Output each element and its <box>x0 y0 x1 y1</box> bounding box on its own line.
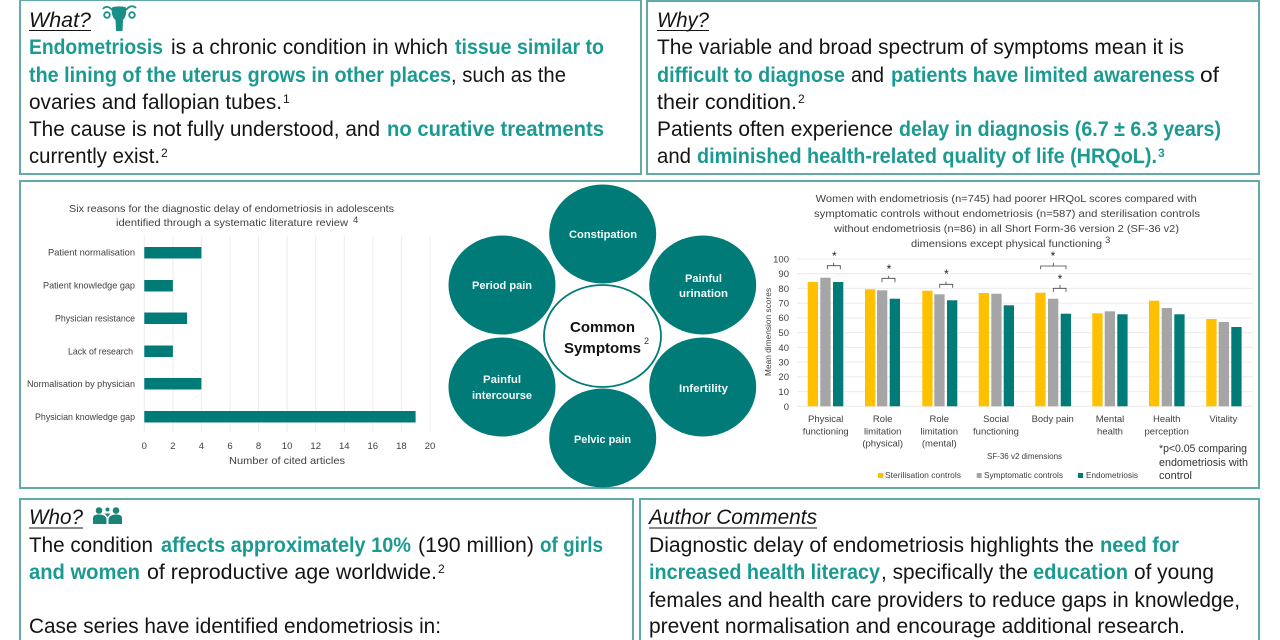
x axis title: Number of cited articles <box>229 455 345 467</box>
diagram: common symptoms <box>448 184 756 488</box>
text block: why body: The variable and broad spectrum of symptoms mean it is <box>657 36 1184 59</box>
y axis labels: 100 <box>773 254 789 266</box>
chart title: dimensions except physical functioning <box>911 238 1102 250</box>
symptom: infertility <box>649 338 756 436</box>
text block: what body: , such as the <box>451 64 566 87</box>
symptom: painful intercourse: intercourse <box>472 390 532 402</box>
category labels: perception <box>1145 426 1189 437</box>
legend: Endometriosis <box>1086 470 1138 480</box>
centre: common symptoms <box>544 285 661 387</box>
bar chart: reasons for diagnostic delay <box>27 203 435 467</box>
bars: sterilisation controls <box>808 282 1217 406</box>
bars: endometriosis <box>833 282 1242 406</box>
text block: who body: (190 million) <box>418 534 534 557</box>
significance brackets: * <box>944 267 949 281</box>
symptom: period pain: Period pain <box>472 280 532 292</box>
y axis labels: 90 <box>778 269 789 280</box>
symptom: constipation <box>549 184 656 284</box>
bar chart: HRQoL scores <box>763 193 1253 482</box>
category labels: Mental <box>1096 414 1124 425</box>
symptom: painful intercourse: Painful <box>483 374 521 386</box>
text block: who body: and women <box>29 561 140 584</box>
category labels: Physician knowledge gap <box>35 412 135 423</box>
panel: author comments <box>640 499 1259 640</box>
x axis labels: 6 <box>227 441 233 452</box>
symptom: pelvic pain: Pelvic pain <box>574 434 631 446</box>
symptom: period pain <box>448 236 556 334</box>
text block: why body: patients have limited awareness <box>891 64 1195 87</box>
category labels: Patient normalisation <box>48 248 135 258</box>
chart title: without endometriosis (n=86) in all Short Form-36 version 2 (SF-36 v2) <box>833 223 1179 235</box>
text block: why body: and <box>657 145 691 168</box>
y axis labels: 70 <box>778 298 789 310</box>
text block: why body: of <box>1200 64 1219 87</box>
text block: who body: 2 <box>438 562 445 576</box>
text block: what body <box>29 36 604 168</box>
icon: people <box>93 507 122 524</box>
category labels <box>27 248 135 423</box>
text block: author comments body: prevent normalisation and encourage additional research. <box>649 615 1185 638</box>
legend: Sterilisation controls <box>885 470 961 480</box>
y axis labels: 80 <box>778 284 789 295</box>
category labels: Lack of research <box>68 346 133 358</box>
heading: what: What? <box>29 9 91 32</box>
text block: why body: diminished health-related quality of life (HRQoL). <box>697 145 1157 168</box>
heading: author comments: Author Comments <box>647 506 817 529</box>
chart title: Women with endometriosis (n=745) had poorer HRQoL scores compared with <box>816 193 1197 205</box>
text block: who body: The condition <box>29 534 153 557</box>
text block: who body: of girls <box>540 534 603 557</box>
category labels: functioning <box>973 426 1019 437</box>
chart title <box>69 203 394 229</box>
chart title: Six reasons for the diagnostic delay of endometriosis in adolescents <box>69 203 394 215</box>
text block: why body: Patients often experience <box>657 118 893 141</box>
y axis labels: 20 <box>778 372 789 383</box>
y axis labels: 10 <box>778 387 789 398</box>
category labels: Normalisation by physician <box>27 379 135 390</box>
category labels: (mental) <box>922 439 957 450</box>
text block: why body: 2 <box>798 92 805 106</box>
legend <box>878 470 1138 480</box>
category labels: Social <box>983 414 1009 425</box>
category labels: (physical) <box>862 439 903 450</box>
significance brackets: * <box>1058 272 1063 286</box>
significance brackets: * <box>832 249 837 263</box>
symptom: constipation: Constipation <box>569 229 637 241</box>
footnote <box>1159 443 1248 482</box>
category labels: Vitality <box>1209 414 1237 425</box>
text block: what body: no curative treatments <box>387 118 604 141</box>
panel: what <box>20 0 641 174</box>
text block: what body: currently exist. <box>29 145 160 168</box>
text block: author comments body: of young <box>1134 561 1214 584</box>
text block: what body: the lining of the uterus grows in other places <box>29 64 451 87</box>
icon: uterus <box>103 6 136 31</box>
category labels: Health <box>1153 414 1180 425</box>
category labels: Patient knowledge gap <box>43 280 135 292</box>
text block: why body: delay in diagnosis (6.7 ± 6.3 years) <box>899 118 1221 141</box>
text block: author comments body: Diagnostic delay of endometriosis highlights the <box>649 534 1094 557</box>
text block: what body: 1 <box>283 92 290 106</box>
category labels: Body pain <box>1032 414 1074 425</box>
x axis labels: 2 <box>170 441 176 452</box>
centre: common symptoms: 2 <box>644 336 649 346</box>
x axis labels <box>142 441 435 452</box>
x axis labels: 8 <box>256 441 261 452</box>
heading: who: Who? <box>29 506 83 529</box>
category labels: limitation <box>921 426 958 437</box>
text block: why body: difficult to diagnose <box>657 64 845 87</box>
category labels: Role <box>930 414 949 425</box>
y axis labels: 0 <box>784 402 789 413</box>
significance brackets <box>827 249 1066 292</box>
significance brackets: * <box>887 262 892 276</box>
text block: what body: Endometriosis <box>29 36 163 59</box>
bars <box>144 247 416 422</box>
x axis labels: 16 <box>368 441 378 452</box>
heading: why: Why? <box>657 9 709 32</box>
text block: author comments body: , specifically the <box>881 561 1028 584</box>
text block: why body: 3 <box>1158 146 1165 160</box>
x axis labels: 12 <box>310 441 321 452</box>
category labels: functioning <box>803 426 849 437</box>
chart title: identified through a systematic literature review <box>116 217 348 229</box>
significance brackets: * <box>1051 249 1056 263</box>
symptom: pelvic pain <box>549 388 656 488</box>
category labels: limitation <box>864 426 901 437</box>
centre: common symptoms: Symptoms <box>564 340 641 357</box>
x axis labels: 14 <box>339 441 350 452</box>
chart title <box>814 193 1200 250</box>
text block: what body: tissue similar to <box>455 36 604 59</box>
x axis labels: 10 <box>282 441 292 452</box>
text block: author comments body <box>649 534 1240 638</box>
text block: why body: and <box>851 64 884 87</box>
x axis labels: 20 <box>425 441 435 452</box>
symptom: painful urination <box>649 236 756 334</box>
bars: symptomatic controls <box>820 278 1229 406</box>
text block: what body: The cause is not fully understood, and <box>29 118 380 141</box>
chart title: 4 <box>353 215 358 226</box>
y axis title: Mean dimension scores <box>763 288 773 376</box>
symptom: painful intercourse <box>448 338 556 436</box>
text block: who body: affects approximately 10% <box>161 534 411 557</box>
footnote: endometriosis with <box>1159 457 1248 469</box>
x axis labels: 4 <box>199 441 204 452</box>
footnote: control <box>1159 470 1192 482</box>
y axis labels <box>773 254 789 413</box>
text block: who body: of reproductive age worldwide. <box>147 561 437 584</box>
text block: author comments body: females and health care providers to reduce gaps in knowledge, <box>649 589 1240 612</box>
text block: what body: is a chronic condition in which <box>171 36 448 59</box>
panel: why <box>647 1 1259 174</box>
category labels: Physician resistance <box>55 314 135 324</box>
y axis labels: 30 <box>778 358 789 368</box>
category labels <box>803 414 1237 450</box>
centre: common symptoms: Common <box>570 319 635 336</box>
panel: who <box>20 499 633 640</box>
symptom: painful urination: Painful <box>685 273 722 285</box>
y axis labels: 40 <box>778 343 789 354</box>
x axis labels: 18 <box>396 441 407 452</box>
text block: author comments body: increased health literacy <box>649 561 880 584</box>
category labels: health <box>1097 426 1123 437</box>
text block: who body <box>29 534 603 638</box>
legend: Symptomatic controls <box>984 470 1063 480</box>
category labels: Role <box>873 414 892 425</box>
text block: why body <box>657 36 1221 168</box>
symptom: infertility: Infertility <box>679 383 729 395</box>
chart title: symptomatic controls without endometriosis (n=587) and sterilisation controls <box>814 208 1200 220</box>
text block: author comments body: education <box>1033 561 1128 584</box>
y axis labels: 50 <box>778 328 789 339</box>
category labels: Physical <box>808 414 843 425</box>
x axis labels: 0 <box>142 441 147 452</box>
text block: what body: 2 <box>161 146 168 160</box>
chart title: 3 <box>1105 235 1110 246</box>
text block: why body: their condition. <box>657 91 797 114</box>
symptom: painful urination: urination <box>679 288 728 300</box>
panel: charts and symptoms <box>20 181 1259 488</box>
text block: who body: Case series have identified endometriosis in: <box>29 615 441 638</box>
x axis title: SF-36 v2 dimensions <box>987 451 1062 461</box>
text block: what body: ovaries and fallopian tubes. <box>29 91 282 114</box>
y axis labels: 60 <box>778 313 789 324</box>
text block: author comments body: need for <box>1100 534 1179 557</box>
footnote: *p<0.05 comparing <box>1159 443 1247 455</box>
